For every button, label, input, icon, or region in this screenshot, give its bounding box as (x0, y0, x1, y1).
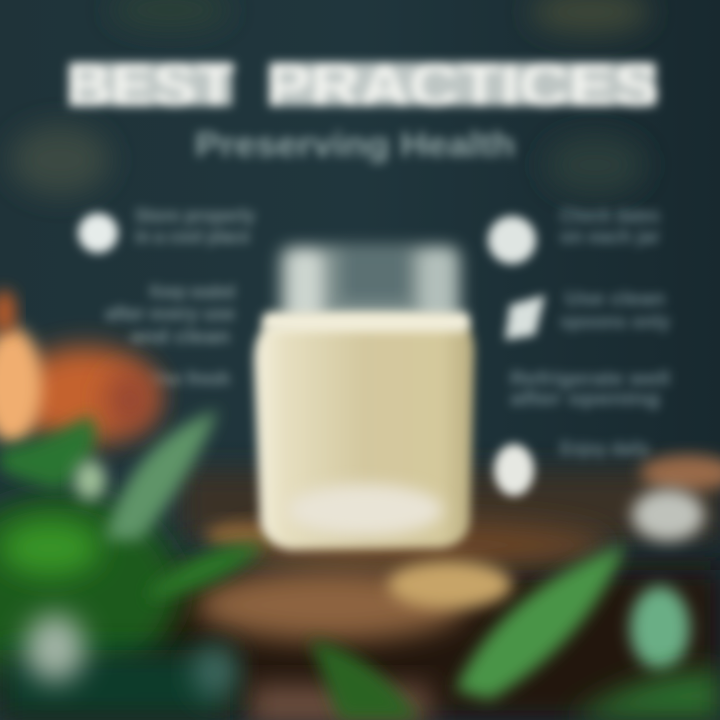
title: BEST (65, 52, 235, 119)
icon: right bullet three (494, 444, 534, 496)
icon: left bullet (78, 213, 118, 253)
right list text: after opening (510, 389, 660, 410)
left list text: Use fresh (150, 369, 230, 390)
wooden table (195, 520, 610, 720)
left list text: and clean (130, 327, 230, 348)
jar rim highlight (262, 312, 470, 332)
title (65, 52, 660, 119)
right list text: on each jar (560, 227, 661, 248)
left list text (105, 206, 255, 390)
icon: right bullet two (505, 295, 545, 340)
right list: icons and text (488, 206, 670, 496)
subtitle: Preserving Health (195, 126, 515, 164)
icon: right bullet one (488, 216, 536, 264)
left list text: in a cool place (135, 227, 250, 248)
jar body (254, 317, 474, 550)
right list text (510, 206, 670, 460)
jar label (287, 484, 443, 536)
jar lid (278, 245, 462, 330)
green leaves right (310, 545, 720, 720)
left list text: Store properly (135, 206, 255, 227)
right list text: Enjoy daily (560, 439, 650, 460)
right list text: Use clean (565, 289, 665, 310)
jar (254, 245, 474, 550)
right list text: Check dates (560, 206, 660, 227)
green leaves left (0, 410, 265, 720)
peach fruit (0, 290, 157, 443)
title: PRACTICES (265, 52, 660, 119)
right list text: Refrigerate well (510, 369, 670, 390)
right list text: spoons only (560, 312, 670, 333)
small bowl (632, 455, 720, 541)
left list text: Keep sealed (150, 282, 235, 303)
left list: icons and text (78, 206, 255, 390)
left list text: after every use (105, 304, 235, 325)
